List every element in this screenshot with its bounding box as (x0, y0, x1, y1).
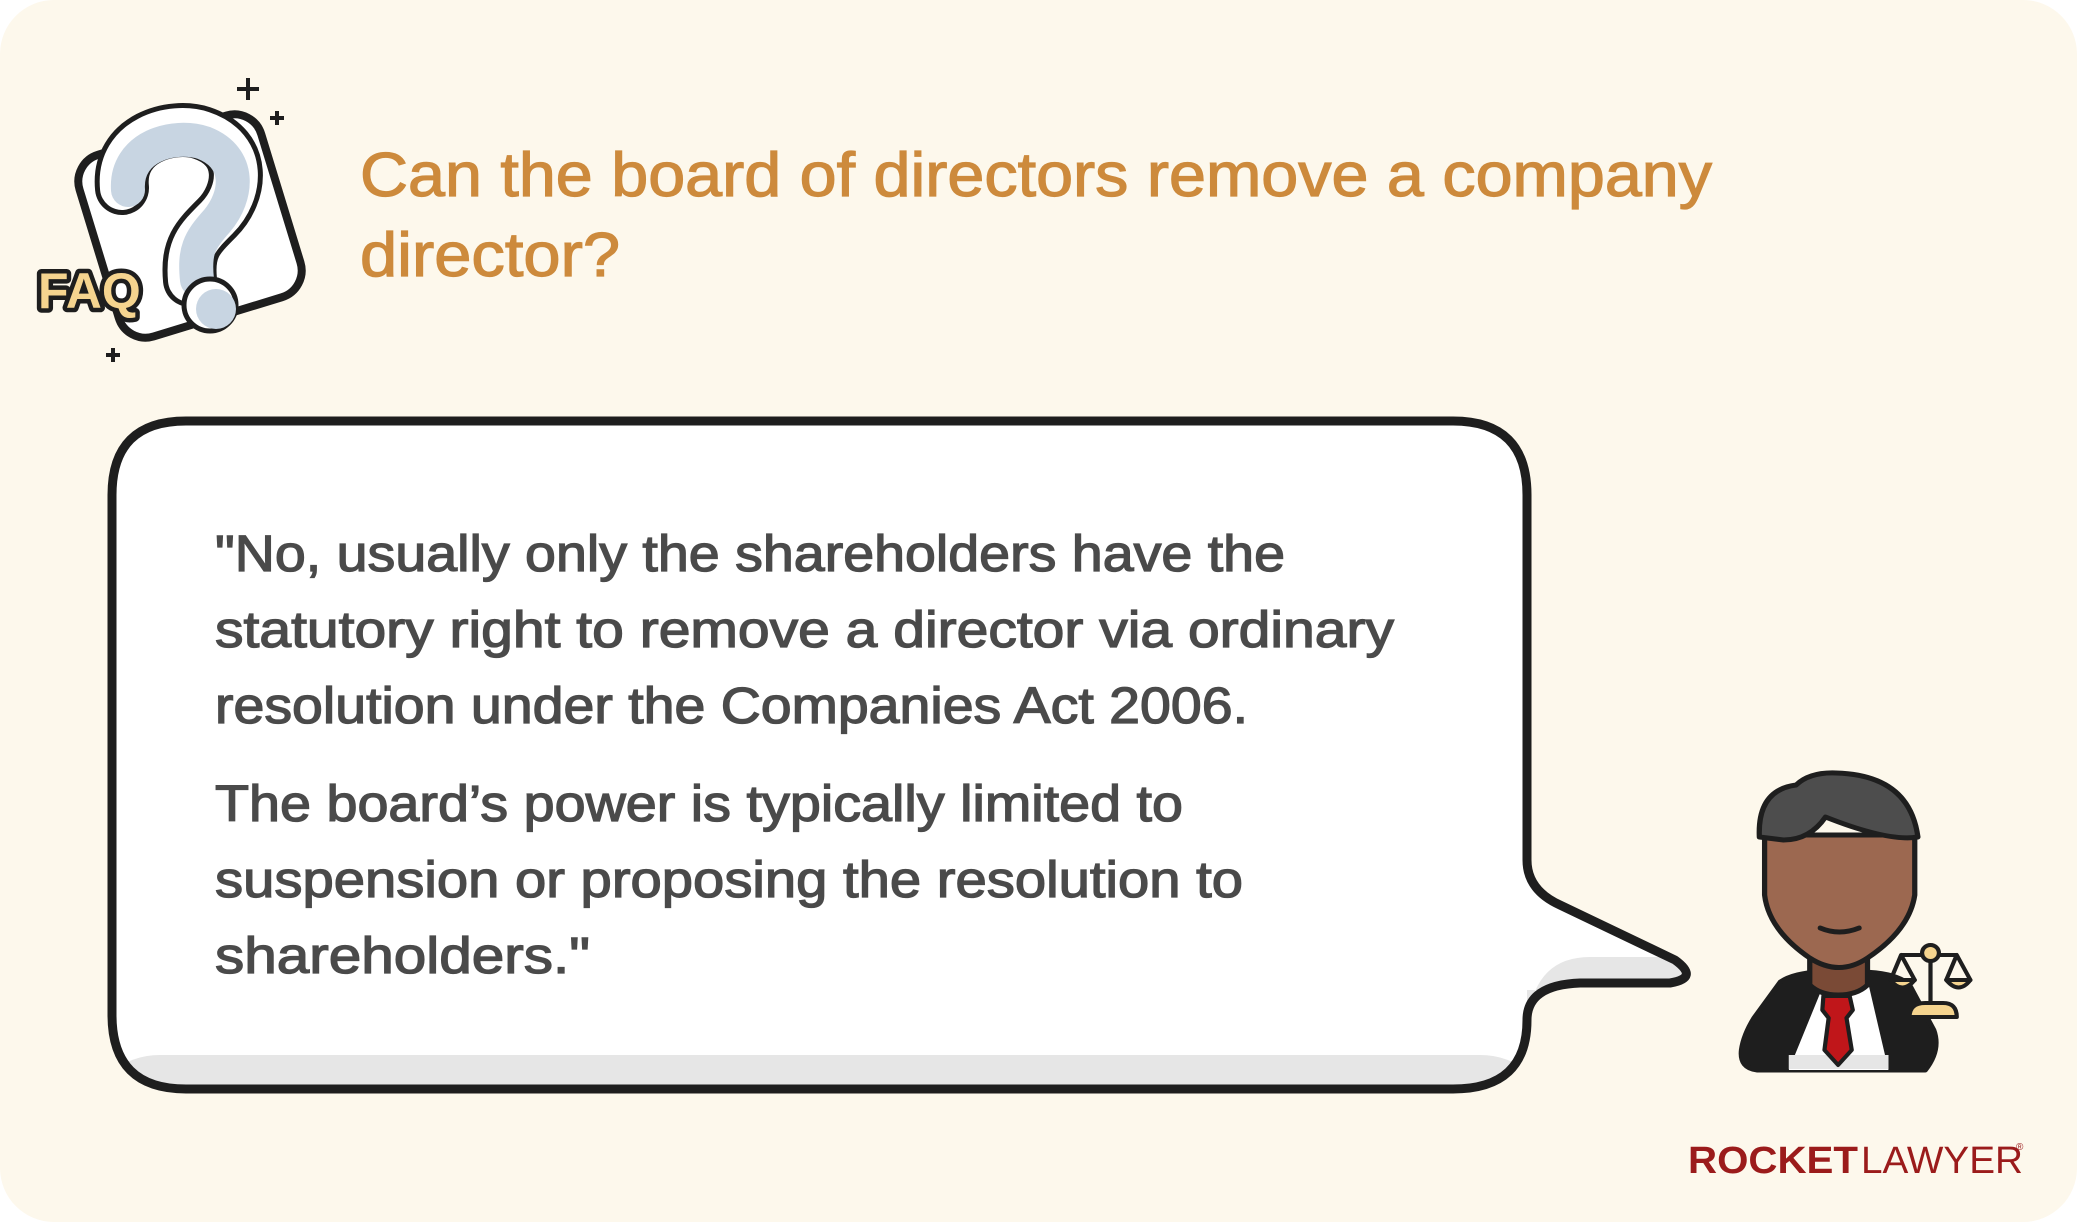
logo: Rocket Lawyer: ROCKET (1688, 1140, 1858, 1182)
quote text: statutory right to remove a director via ordinary (215, 601, 1395, 658)
title: director? (360, 221, 620, 290)
quote text: suspension or proposing the resolution to (215, 851, 1243, 908)
icon: lawyer with scales (1741, 773, 1970, 1070)
quote text: "No, usually only the shareholders have the (215, 525, 1285, 582)
icon: FAQ question card (38, 78, 309, 362)
title: Can the board of directors remove a company (360, 141, 1712, 210)
logo: Rocket Lawyer: LAWYER (1861, 1140, 2023, 1182)
logo: Rocket Lawyer (1688, 1140, 2024, 1182)
quote text: shareholders." (215, 927, 590, 984)
quote text: resolution under the Companies Act 2006. (215, 677, 1248, 734)
logo: Rocket Lawyer: ® (2016, 1142, 2024, 1153)
icon: FAQ question card: FAQ (38, 263, 141, 319)
speech bubble (108, 416, 1691, 1094)
quote text: The board’s power is typically limited to (215, 775, 1183, 832)
